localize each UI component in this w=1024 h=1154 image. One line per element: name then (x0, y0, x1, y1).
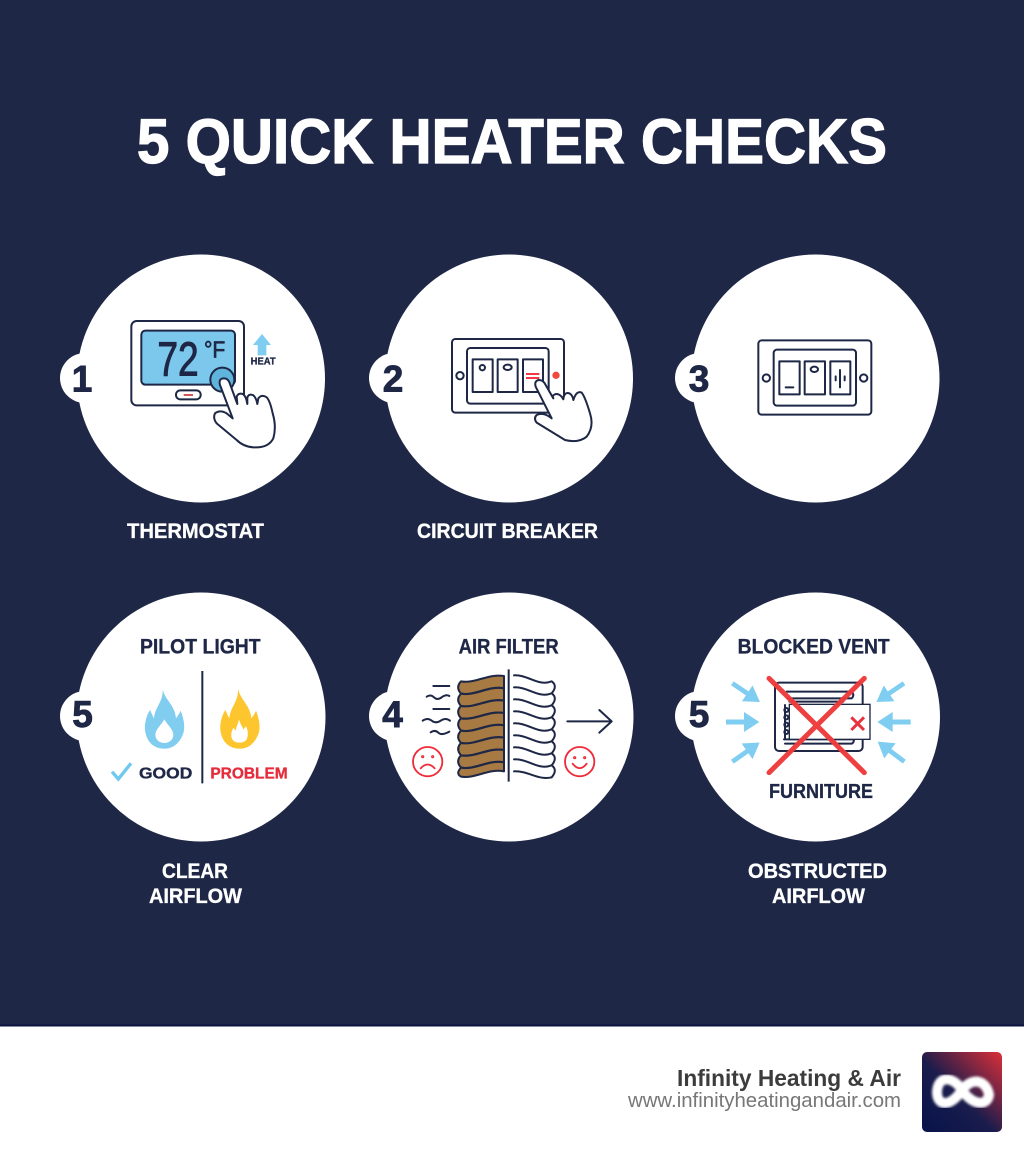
icon: dirty filter side (458, 676, 504, 777)
company name: Infinity Heating & Air (677, 1065, 901, 1091)
icon: sad face (413, 747, 442, 776)
panel: air filter (369, 592, 634, 842)
icon: thermostat: HEAT (251, 357, 276, 368)
icon: thermostat: °F (204, 336, 225, 362)
number 3: 3 (689, 358, 709, 400)
label: clear airflow: CLEAR (162, 859, 228, 883)
temperature reading: 72 (157, 333, 199, 387)
company url: www.infinityheatingandair.com (627, 1090, 901, 1112)
panel: pilot light (60, 592, 326, 842)
panel: step 2 circuit breaker (369, 254, 633, 502)
panel: step 3 switch (675, 254, 940, 502)
panel: step 1 thermostat (60, 254, 325, 502)
heading: pilot light: PILOT LIGHT (140, 636, 261, 659)
label: problem: PROBLEM (210, 765, 288, 782)
label: obstructed airflow: OBSTRUCTED (748, 859, 887, 883)
icon: yellow flame (220, 689, 260, 749)
icon: thermostat (131, 321, 276, 447)
label: circuit breaker: CIRCUIT BREAKER (417, 519, 598, 543)
icon: infinity logo (922, 1052, 1002, 1132)
panel: blocked vent (675, 592, 940, 842)
icon: switch plate (758, 340, 871, 415)
title: 5 QUICK HEATER CHECKS (137, 107, 887, 177)
number 2: 2 (383, 358, 403, 400)
number 5: 5 (72, 694, 93, 735)
icon: breaker with hand (452, 339, 592, 441)
label: clear airflow: AIRFLOW (149, 884, 243, 908)
icon: pointing hand (214, 378, 275, 447)
icon: vent with furniture (775, 683, 870, 751)
icon: heat arrow (253, 334, 271, 355)
icon: blue flame (145, 689, 184, 749)
icon: restricted air lines (423, 686, 450, 734)
label: good: GOOD (139, 765, 192, 782)
icon: happy face (565, 747, 594, 776)
label: furniture: FURNITURE (769, 781, 873, 803)
label: thermostat: THERMOSTAT (127, 519, 264, 543)
number 1: 1 (72, 358, 92, 400)
label: clear airflow (149, 859, 243, 908)
number 5: 5 (689, 694, 709, 735)
heading: blocked vent: BLOCKED VENT (738, 636, 890, 659)
heading: air filter: AIR FILTER (459, 636, 559, 659)
footer panel (0, 1026, 1024, 1154)
icon: airflow arrows (726, 675, 911, 769)
label: obstructed airflow (748, 859, 887, 908)
icon: airflow arrow (567, 710, 612, 733)
icon: clean filter side (514, 675, 555, 778)
icon: check mark (112, 763, 131, 779)
number 4: 4 (382, 694, 403, 735)
label: obstructed airflow: AIRFLOW (772, 884, 866, 908)
icon: red cross (769, 678, 864, 773)
